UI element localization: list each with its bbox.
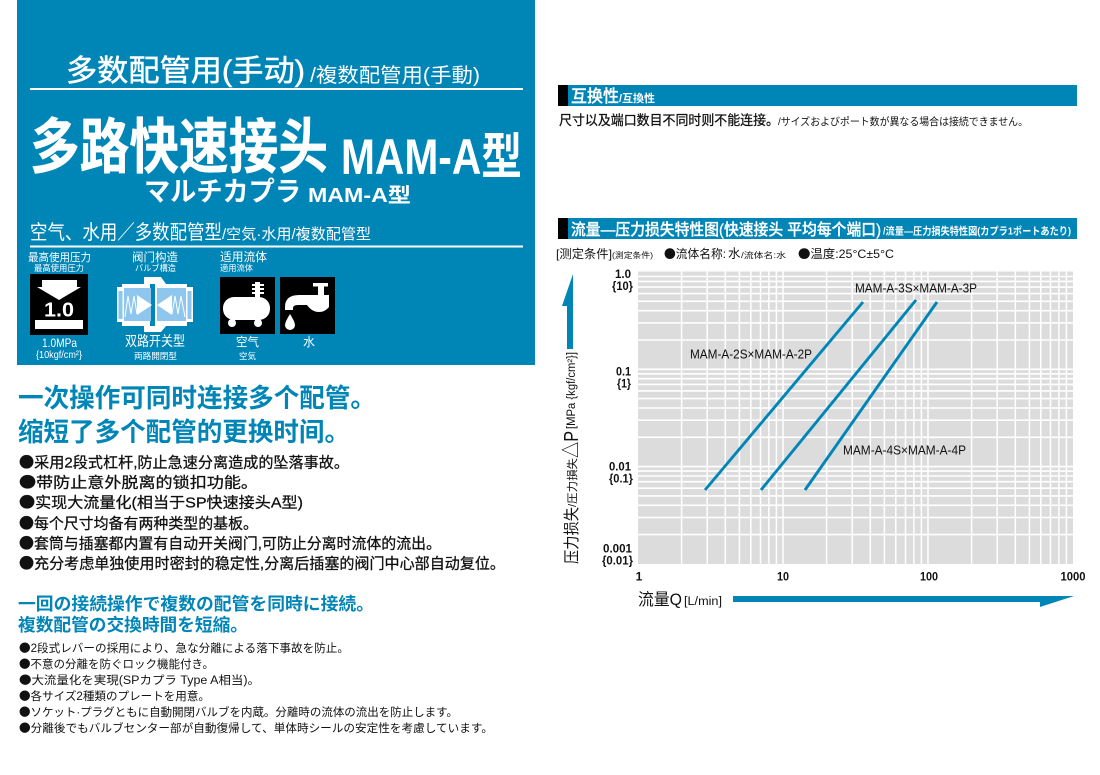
spec: applicable fluids: 水 [303,335,315,349]
title: product name: 多路快速接头 [30,114,328,181]
section bar: flow pressure loss: /流量—圧力損失特性図(カプラ1ポートあたり) [883,224,1071,238]
heading: Chinese feature headline [18,383,376,447]
list: Japanese features [19,640,493,736]
y-axis tick labels: 1.0 [615,267,631,281]
y-axis tick labels: {0.1} [609,472,633,486]
icon: double shut-off valve [117,277,193,332]
text: measurement conditions: ●温度:25°C±5°C [798,245,894,262]
y-axis tick labels [602,267,633,568]
section bar: compatibility [558,85,1077,106]
x-axis title: flow [638,590,722,609]
heading: Japanese feature headline: 複数配管の交換時間を短縮。 [18,615,248,635]
data line: MAM-A-3S × MAM-A-3P [761,300,916,490]
y-axis title: pressure loss [560,352,583,564]
list: Japanese features: ●分離後でもバルブセンター部が自動復帰して、単体時シールの安定性を考慮しています。 [19,720,493,736]
list: Chinese features: ●采用2段式杠杆,防止急速分离造成的坠落事故。 [19,452,349,472]
x-axis tick labels: 1 [636,570,643,584]
title: product name: MAM-A型 [341,129,522,185]
arrow: flow axis [733,596,1074,607]
section bar: flow pressure loss: 流量—压力损失特性图(快速接头 平均每个端口) [571,221,881,239]
heading: multi-piping use: 多数配管用(手动) [66,55,305,88]
spec: max operating pressure: 最高使用圧力 [34,263,84,273]
x-axis title: flow: 流量Q [638,590,682,609]
list: Chinese features: ●带防止意外脱离的锁扣功能。 [19,472,258,492]
heading: Japanese feature headline: 一回の接続操作で複数の配管を同時に接続。 [18,594,374,614]
subtitle: Japanese product name: マルチカプラ [144,177,301,207]
text: compatibility note: 尺寸以及端口数目不同时则不能连接。 [559,112,779,128]
x-axis title: flow: [L/min] [684,596,722,608]
text: measurement conditions: [测定条件] [556,246,612,261]
icon: air compressor [220,277,275,334]
label: 4S × 4P: MAM-A-4S×MAM-A-4P [843,444,966,458]
spec: applicable fluids: 适用流体 [220,250,267,264]
data line: MAM-A-2S × MAM-A-2P [705,302,863,490]
subtitle: Japanese product name [144,177,411,207]
subtitle: Japanese product name: MAM-A型 [308,184,411,207]
spec: applicable fluids: 空气 [236,334,259,349]
heading: Japanese feature headline [18,594,374,635]
list: Chinese features [19,452,505,574]
heading: Chinese feature headline: 缩短了多个配管的更换时间。 [18,417,350,447]
text: air and water use: /空気·水用/複数配管型 [222,226,371,243]
spec: applicable fluids: 適用流体 [220,263,253,273]
label: 3S × 3P: MAM-A-3S×MAM-A-3P [855,282,977,296]
list: Chinese features: ●套筒与插塞都内置有自动开关阀门,可防止分离时流体的流出。 [19,532,441,554]
title: product name [30,114,522,185]
arrow: pressure axis [562,274,573,349]
heading: multi-piping use: /複数配管用(手動) [310,64,480,87]
heading: Chinese feature headline: 一次操作可同时连接多个配管。 [18,383,376,413]
spec: max operating pressure: 最高使用压力 [28,250,91,264]
y-axis tick labels: {1} [617,376,631,390]
data line: MAM-A-4S × MAM-A-4P [805,302,937,490]
heading: multi-piping use [66,55,480,88]
list: Chinese features: ●充分考虑单独使用时密封的稳定性,分离后插塞的阀门中心部自动复位。 [19,552,505,574]
x-axis tick labels: 1000 [1060,570,1086,584]
spec: applicable fluids: 空気 [239,351,256,361]
list: Chinese features: ●实现大流量化(相当于SP快速接头A型) [19,492,303,512]
spec: valve structure [117,250,193,361]
text: compatibility note: /サイズおよびポート数が異なる場合は接続できません。 [778,115,1028,128]
y-axis tick labels: {0.01} [602,554,633,568]
x-axis tick labels: 10 [777,570,789,584]
spec: applicable fluids [220,250,335,361]
y-axis tick labels: 0.001 [603,542,632,556]
spec: valve structure: 両路開閉型 [134,351,177,361]
y-axis title: pressure loss: △P [560,431,583,458]
x-axis tick labels: 100 [920,570,938,584]
label: 2S × 2P: MAM-A-2S×MAM-A-2P [690,348,812,362]
text: air and water use: 空气、水用／多数配管型 [30,221,222,244]
y-axis title: pressure loss: /圧力損失 [565,458,579,507]
icon: pressure 1.0: 1.0 [44,300,74,322]
x-axis tick labels [636,570,1086,584]
y-axis title: pressure loss: [MPa {kgf/cm²}] [566,352,578,429]
list: Chinese features: ●每个尺寸均备有两种类型的基板。 [19,512,258,534]
text: air and water use [30,221,371,244]
spec: valve structure: 阀门构造 [132,250,178,264]
y-axis tick labels: {10} [612,279,633,293]
list: Japanese features: ●不意の分離を防ぐロック機能付き。 [19,656,214,672]
chart: flow vs pressure loss [602,267,1086,584]
text: measurement conditions: ●流体名称: [664,245,726,262]
text: measurement conditions: /流体名:水 [741,250,786,260]
y-axis tick labels: 0.01 [609,460,631,474]
spec: max operating pressure: 1.0MPa [42,336,77,350]
list: Japanese features: ●ソケット·プラグともに自動開閉バルブを内蔵。分離時の流体の流出を防止します。 [19,704,458,720]
text: measurement conditions: (測定条件) [612,250,653,260]
section bar: compatibility: /互換性 [619,91,655,105]
spec: valve structure: 双路开关型 [125,333,185,349]
list: Japanese features: ●2段式レバーの採用により、急な分離による落下事故を防止。 [19,640,349,656]
text: measurement conditions [556,245,894,262]
y-axis title: pressure loss: 压力损失 [563,507,581,564]
y-axis tick labels: 0.1 [616,364,631,378]
section bar: flow pressure loss [558,218,1077,239]
spec: max operating pressure: {10kgf/cm²} [36,350,83,361]
text: compatibility note [559,112,1028,128]
panel: product header [17,0,535,365]
list: Japanese features: ●各サイズ2種類のプレートを用意。 [19,688,210,704]
icon: water tap [280,277,335,334]
section bar: compatibility: 互换性 [571,87,619,106]
spec: max operating pressure [28,250,91,361]
spec: valve structure: バルブ構造 [135,263,176,273]
list: Japanese features: ●大流量化を実現(SPカプラ Type A相当)。 [19,672,260,688]
text: measurement conditions: 水 [728,247,741,261]
